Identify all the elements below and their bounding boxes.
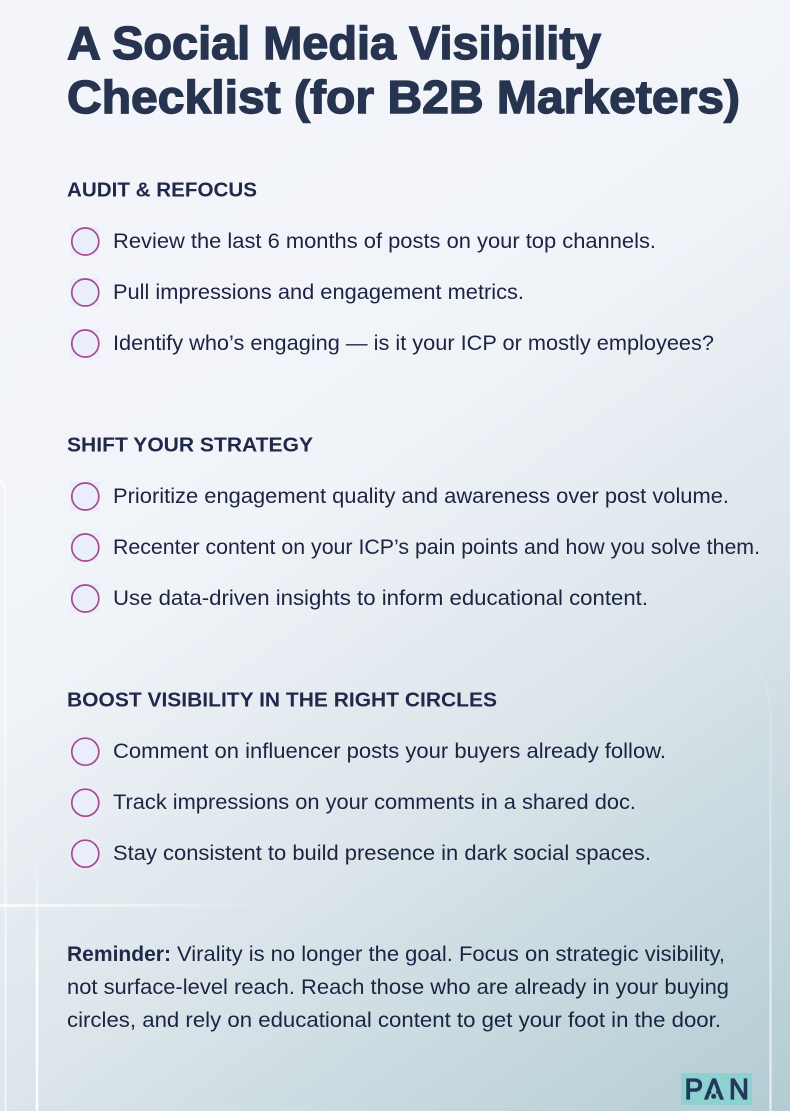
panel: audit and refocus [67, 178, 714, 358]
reminder text block: Virality is no longer the goal. Focus on strategic visibility, [177, 943, 725, 966]
title: Checklist (for B2B Marketers) [67, 71, 740, 123]
checklist item: recenter content: Recenter content on your ICP’s pain points and how you solve them. [113, 536, 760, 559]
checklist item: prioritize engagement: Prioritize engagement quality and awareness over post volume. [113, 485, 729, 508]
checklist item: identify who is engaging: Identify who’s engaging — is it your ICP or mostly employees? [113, 332, 714, 355]
title [67, 17, 740, 123]
heading: boost visibility: BOOST VISIBILITY IN THE RIGHT CIRCLES [67, 688, 497, 712]
checklist item: comment on influencer posts: Comment on influencer posts your buyers already follow. [113, 740, 666, 763]
reminder text block: circles, and rely on educational content to get your foot in the door. [67, 1009, 721, 1032]
checklist item: pull metrics: Pull impressions and engagement metrics. [113, 281, 524, 304]
panel: shift your strategy [67, 434, 760, 612]
checklist item: data-driven insights: Use data-driven insights to inform educational content. [113, 587, 648, 610]
title: A Social Media Visibility [67, 17, 601, 69]
reminder text block [67, 943, 729, 1032]
reminder text block: Reminder: [67, 943, 171, 966]
heading: shift your strategy: SHIFT YOUR STRATEGY [67, 434, 313, 456]
reminder text block: not surface-level reach. Reach those who are already in your buying [67, 976, 729, 999]
checklist item: track impressions: Track impressions on your comments in a shared doc. [113, 791, 636, 814]
heading: audit and refocus: AUDIT & REFOCUS [67, 178, 257, 202]
checklist item: stay consistent: Stay consistent to build presence in dark social spaces. [113, 842, 651, 865]
checklist item: review posts: Review the last 6 months of posts on your top channels. [113, 230, 656, 253]
panel: boost visibility [67, 688, 666, 868]
logo: PAN: PAN [685, 1072, 749, 1105]
